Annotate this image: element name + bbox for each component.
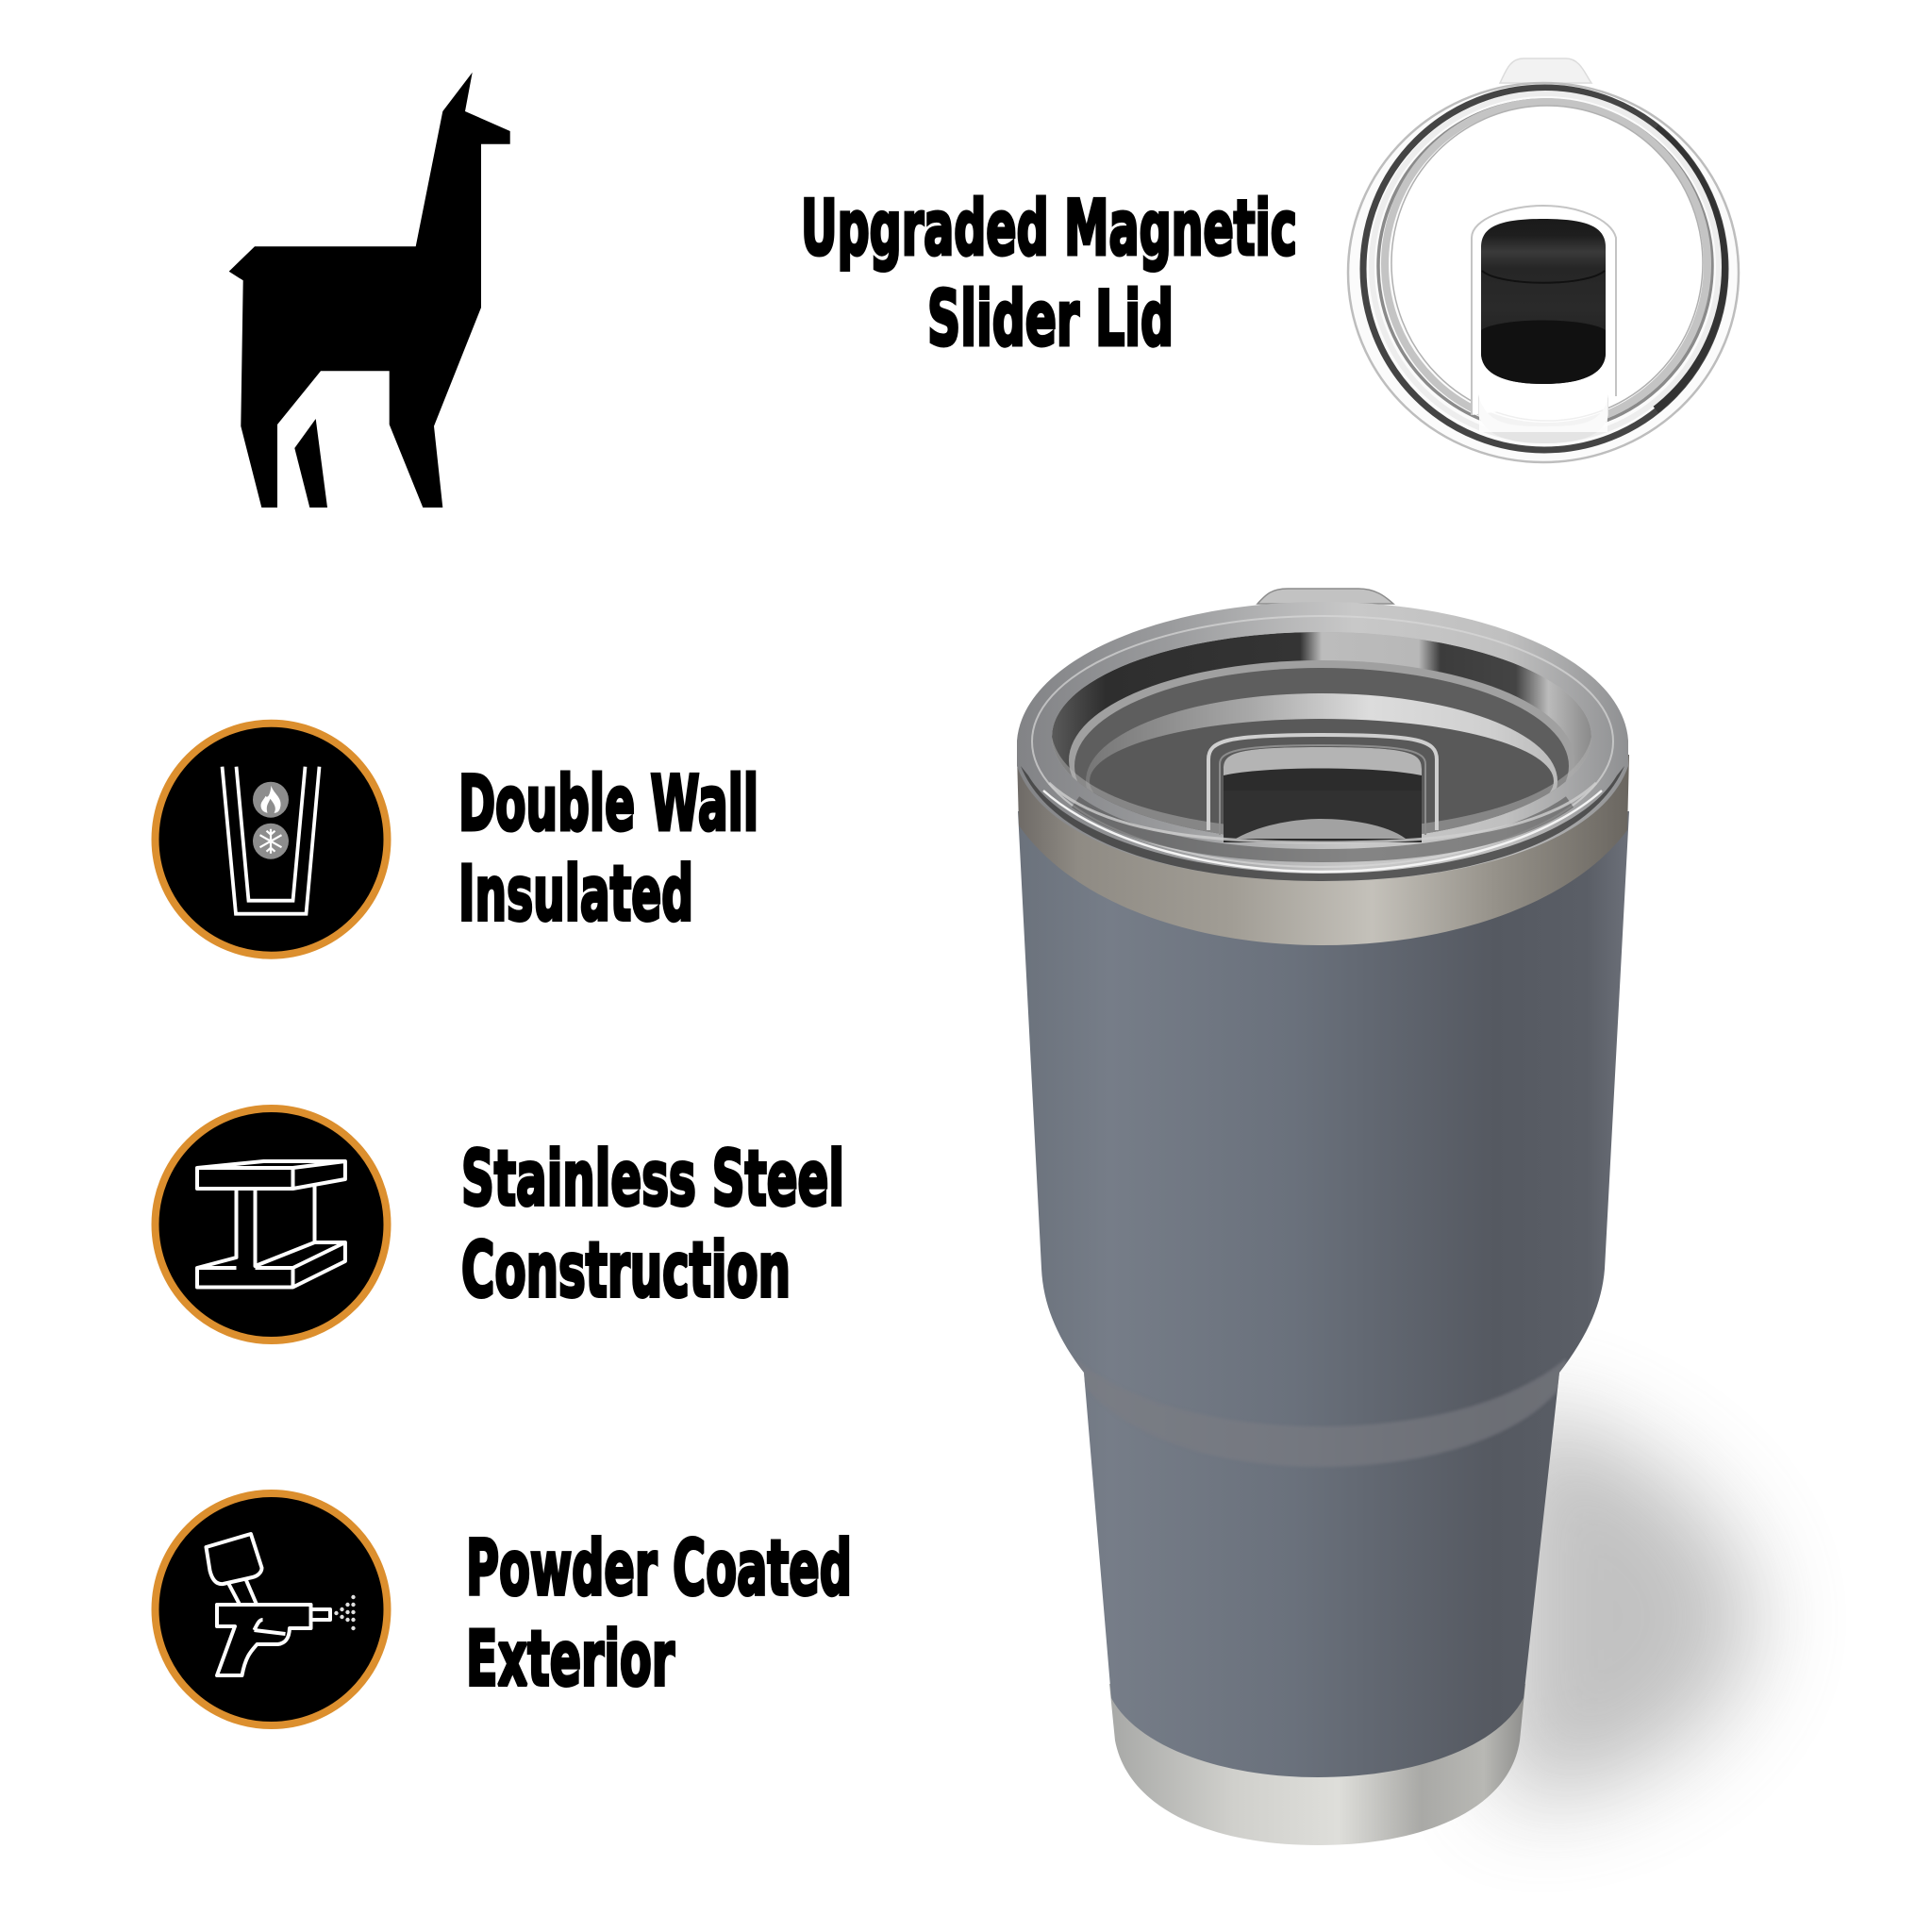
powder coated body — [1018, 811, 1629, 1777]
heading: upgraded magnetic slider lid: Upgraded Magnetic — [801, 185, 1297, 272]
text: stainless steel construction — [461, 1135, 844, 1314]
image: tumbler with shadow — [1017, 589, 1755, 1845]
text: double wall insulated — [458, 760, 758, 938]
text: double wall insulated: Insulated — [458, 850, 693, 938]
lid — [1017, 589, 1628, 881]
text: stainless steel construction: Stainless Steel — [461, 1135, 844, 1223]
icon badge: stainless steel beam — [155, 1108, 387, 1341]
icon badge: powder coat spray gun — [155, 1493, 387, 1725]
front lip of lid — [1021, 766, 1624, 881]
slider opening — [1208, 735, 1437, 842]
text: double wall insulated: Double Wall — [458, 760, 758, 847]
steel collar band — [1017, 755, 1629, 945]
icon badge: double wall insulated — [155, 724, 387, 956]
icon: llama logo — [229, 73, 510, 508]
text: powder coated exterior: Powder Coated — [466, 1524, 852, 1612]
shadow — [1500, 1406, 1755, 1802]
text: powder coated exterior: Exterior — [466, 1615, 675, 1703]
text: stainless steel construction: Construction — [461, 1226, 791, 1314]
magnet slider — [1481, 219, 1606, 384]
heading: upgraded magnetic slider lid — [801, 185, 1297, 362]
heading: upgraded magnetic slider lid: Slider Lid — [927, 275, 1174, 362]
image: clear magnetic slider lid — [1348, 58, 1739, 462]
text: powder coated exterior — [466, 1524, 852, 1703]
shoulder highlight — [1075, 1358, 1568, 1467]
base steel ring — [1109, 1684, 1525, 1845]
